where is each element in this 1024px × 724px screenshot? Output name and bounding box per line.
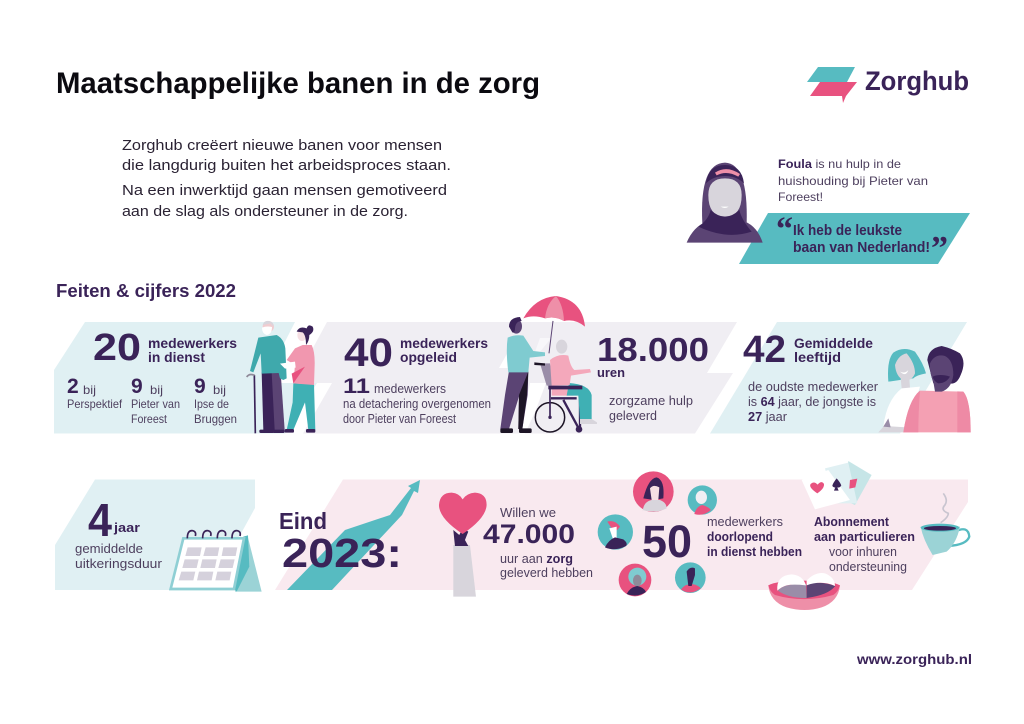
callout: quote: ” <box>931 230 948 267</box>
intro text: Zorghub creëert nieuwe banen voor mensen <box>122 137 442 154</box>
icon: playing cards <box>802 461 872 509</box>
Foula text: Foreest! <box>778 190 823 204</box>
panel: Eind 2023: Eind <box>279 508 327 534</box>
icon: calendar <box>171 531 262 592</box>
panel: Eind 2023: geleverd hebben <box>500 565 593 580</box>
panel: Eind 2023: Abonnement <box>814 515 890 529</box>
callout: quote: baan van Nederland! <box>793 240 930 256</box>
panel: 4 jaar uitkeringsduur: jaar <box>113 520 140 535</box>
icon: portraits around 50 <box>598 471 717 596</box>
icon: hand holding heart <box>439 493 487 597</box>
callout: quote: “ <box>776 211 793 248</box>
Foula text: huishouding bij Pieter van <box>778 174 928 188</box>
panel: 20 medewerkers: Pieter van <box>131 397 180 411</box>
logo: Zorghub: Zorghub <box>865 66 969 96</box>
panel: 20 medewerkers: medewerkers <box>148 336 237 351</box>
panel: 42 gemiddelde leeftijd: is 64 jaar, de jongste is <box>748 394 876 409</box>
panel: 40 medewerkers and 18.000 uren: 11 <box>343 375 370 398</box>
panel: 20 medewerkers: 9 <box>131 375 143 398</box>
panel: 20 medewerkers: 9 <box>194 375 206 398</box>
panel: 20 medewerkers: bij <box>150 383 163 397</box>
panel: 20 medewerkers: bij <box>83 383 96 397</box>
panel: Eind 2023: Willen we <box>500 505 556 520</box>
Foula text <box>778 157 928 204</box>
panel: 40 medewerkers and 18.000 uren: zorgzame hulp <box>609 393 693 408</box>
icon: Foula portrait <box>687 163 763 243</box>
panel: 40 medewerkers and 18.000 uren: medewerkers <box>400 336 488 351</box>
callout: quote <box>739 211 970 267</box>
panel: 40 medewerkers and 18.000 uren: uren <box>597 366 625 380</box>
panel: 20 medewerkers: Foreest <box>131 412 168 426</box>
panel: 42 gemiddelde leeftijd: 42 <box>743 329 786 371</box>
icon: bowl <box>768 573 840 610</box>
panel: 20 medewerkers: Bruggen <box>194 412 237 426</box>
intro text: aan de slag als ondersteuner in de zorg. <box>122 203 408 220</box>
panel: 4 jaar uitkeringsduur <box>55 480 255 590</box>
panel: 20 medewerkers <box>54 322 317 434</box>
panel: Eind 2023: uur aan zorg <box>500 551 573 566</box>
Foula text: Foula is nu hulp in de <box>778 157 901 171</box>
panel: 40 medewerkers and 18.000 uren: na detachering overgenomen <box>343 397 491 411</box>
arrow: growth <box>287 480 420 590</box>
panel: 4 jaar uitkeringsduur: 4 <box>88 494 112 546</box>
panel: 40 medewerkers and 18.000 uren: 18.000 <box>597 331 709 368</box>
panel: 20 medewerkers: 20 <box>93 327 141 369</box>
panel: 40 medewerkers and 18.000 uren: geleverd <box>609 408 657 423</box>
panel: 20 medewerkers: Ipse de <box>194 397 229 411</box>
panel: 4 jaar uitkeringsduur: uitkeringsduur <box>75 556 163 571</box>
panel: 20 medewerkers: Perspektief <box>67 397 123 411</box>
callout: quote: Ik heb de leukste <box>793 223 902 239</box>
panel: Eind 2023: 2023: <box>282 530 402 576</box>
panel: 40 medewerkers and 18.000 uren: 40 <box>344 331 393 375</box>
icon: man with umbrella pushing wheelchair <box>500 296 597 433</box>
panel: Eind 2023: aan particulieren <box>814 530 915 544</box>
panel: Eind 2023: doorlopend <box>707 530 773 544</box>
panel: Eind 2023: in dienst hebben <box>707 545 802 559</box>
panel: 42 gemiddelde leeftijd: Gemiddelde <box>794 336 873 351</box>
panel: 42 gemiddelde leeftijd: 27 jaar <box>748 409 788 424</box>
icon: two colleagues <box>878 346 971 432</box>
panel: 20 medewerkers: in dienst <box>148 350 206 365</box>
panel: Eind 2023: ondersteuning <box>829 560 907 574</box>
title: Maatschappelijke banen in de zorg <box>56 67 540 100</box>
panel: 4 jaar uitkeringsduur: gemiddelde <box>75 541 143 556</box>
panel: 20 medewerkers: 2 <box>67 375 79 398</box>
panel: Eind 2023: medewerkers <box>707 515 783 529</box>
panel: Eind 2023 <box>275 480 968 590</box>
icon: teacup <box>921 493 969 555</box>
panel: 42 gemiddelde leeftijd <box>710 322 967 434</box>
intro text: Na een inwerktijd gaan mensen gemotiveerd <box>122 182 447 199</box>
intro text <box>122 137 451 220</box>
panel: 40 medewerkers and 18.000 uren: opgeleid <box>400 350 457 365</box>
logo: Zorghub <box>807 66 969 103</box>
panel: Eind 2023: 50 <box>642 516 692 567</box>
panel: 42 gemiddelde leeftijd: leeftijd <box>794 350 841 365</box>
panel: Eind 2023: 47.000 <box>483 519 575 549</box>
website url: www.zorghub.nl <box>856 651 972 667</box>
panel: 40 medewerkers and 18.000 uren: medewerkers <box>374 382 446 396</box>
panel: 42 gemiddelde leeftijd: de oudste medewerker <box>748 379 879 394</box>
panel: 20 medewerkers: bij <box>213 383 226 397</box>
heading: Feiten & cijfers 2022: Feiten & cijfers 2022 <box>56 281 236 301</box>
panel: Eind 2023: voor inhuren <box>829 545 897 559</box>
intro text: die langdurig buiten het arbeidsproces staan. <box>122 157 451 174</box>
panel: 40 medewerkers and 18.000 uren: door Pieter van Foreest <box>343 412 456 426</box>
panel: 40 medewerkers and 18.000 uren <box>294 322 737 434</box>
icon: elderly man with caregiver <box>247 321 315 433</box>
